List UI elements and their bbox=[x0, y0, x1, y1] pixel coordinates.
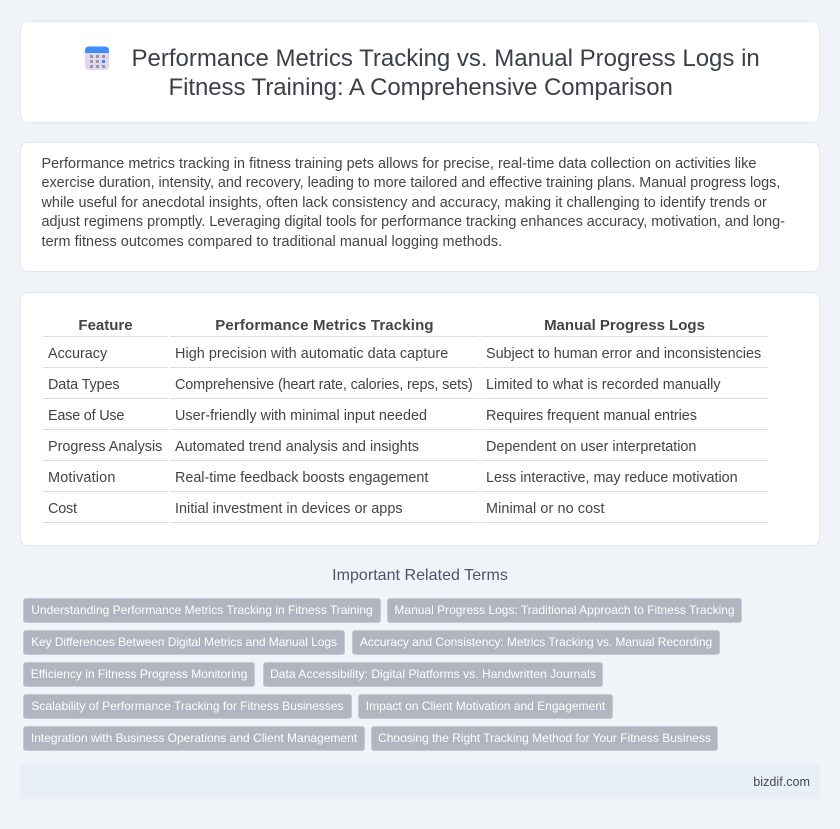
tag bbox=[23, 630, 345, 655]
tag bbox=[352, 630, 720, 655]
tag: Efficiency in Fitness Progress Monitoring bbox=[31, 667, 247, 681]
panel: title card bbox=[20, 21, 820, 123]
row: motivation bbox=[48, 470, 738, 486]
row: ease of use bbox=[48, 408, 697, 424]
tag: Understanding Performance Metrics Tracking in Fitness Training bbox=[31, 603, 373, 617]
tag bbox=[23, 694, 352, 719]
row: accuracy: Accuracy bbox=[48, 346, 107, 362]
tag: Key Differences Between Digital Metrics and Manual Logs bbox=[31, 635, 337, 649]
title bbox=[132, 45, 760, 101]
title: Performance Metrics Tracking vs. Manual Progress Logs in bbox=[132, 45, 760, 72]
row: progress analysis bbox=[48, 439, 696, 455]
tag: Integration with Business Operations and Client Management bbox=[31, 731, 357, 745]
row: progress analysis: Progress Analysis bbox=[48, 439, 162, 455]
footer bar bbox=[20, 765, 820, 799]
tag bbox=[371, 726, 718, 751]
tag bbox=[23, 726, 365, 751]
row: cost: Cost bbox=[48, 501, 77, 517]
title: Fitness Training: A Comprehensive Comparison bbox=[168, 74, 673, 101]
row: motivation: Motivation bbox=[48, 470, 116, 486]
intro paragraph: exercise duration, intensity, and recovery, leading to more tailored and effective training plans. Manual progress logs, bbox=[42, 175, 780, 191]
table header bbox=[78, 317, 705, 334]
row: motivation: Less interactive, may reduce motivation bbox=[486, 470, 738, 486]
tag bbox=[263, 662, 603, 687]
row: data types bbox=[48, 377, 721, 393]
row: cost: Initial investment in devices or apps bbox=[175, 501, 403, 517]
tag: Impact on Client Motivation and Engagement bbox=[366, 699, 605, 713]
intro paragraph: while useful for anecdotal insights, often lack consistency and accuracy, making it challenging to identify trends or bbox=[42, 194, 767, 210]
row: data types: Data Types bbox=[48, 377, 120, 393]
tag: Manual Progress Logs: Traditional Approach to Fitness Tracking bbox=[394, 603, 735, 617]
related terms tags bbox=[23, 598, 742, 751]
table header: Manual Progress Logs bbox=[544, 317, 705, 334]
intro paragraph: term fitness outcomes compared to traditional manual logging methods. bbox=[42, 234, 502, 250]
tag bbox=[358, 694, 613, 719]
tag bbox=[23, 598, 381, 623]
row: data types: Limited to what is recorded manually bbox=[486, 377, 721, 393]
tag bbox=[23, 662, 255, 687]
intro paragraph: adjust regimens promptly. Leveraging digital tools for performance tracking enhances accuracy, motivation, and long- bbox=[42, 214, 785, 230]
tag bbox=[387, 598, 742, 623]
tag: Choosing the Right Tracking Method for Your Fitness Business bbox=[378, 731, 711, 745]
row: cost bbox=[48, 501, 605, 517]
intro paragraph bbox=[42, 156, 785, 250]
row: accuracy bbox=[48, 346, 761, 362]
comparison table bbox=[43, 317, 768, 523]
row: cost: Minimal or no cost bbox=[486, 501, 605, 517]
row: data types: Comprehensive (heart rate, calories, reps, sets) bbox=[175, 377, 473, 393]
row: ease of use: User-friendly with minimal input needed bbox=[175, 408, 427, 424]
related terms heading: Important Related Terms bbox=[332, 567, 508, 584]
intro paragraph: Performance metrics tracking in fitness training pets allows for precise, real-time data collection on activities like bbox=[42, 156, 756, 172]
row: accuracy: Subject to human error and inconsistencies bbox=[486, 346, 761, 362]
panel: intro text card bbox=[20, 142, 820, 272]
row: progress analysis: Dependent on user interpretation bbox=[486, 439, 696, 455]
panel: comparison table card bbox=[20, 292, 820, 546]
row: accuracy: High precision with automatic data capture bbox=[175, 346, 448, 362]
footer text: bizdif.com bbox=[753, 775, 810, 789]
table header: Performance Metrics Tracking bbox=[215, 317, 434, 334]
row: motivation: Real-time feedback boosts engagement bbox=[175, 470, 428, 486]
row: ease of use: Requires frequent manual entries bbox=[486, 408, 697, 424]
table header: Feature bbox=[78, 317, 133, 334]
row: ease of use: Ease of Use bbox=[48, 408, 124, 424]
icon: calendar bbox=[85, 46, 109, 70]
row: progress analysis: Automated trend analysis and insights bbox=[175, 439, 419, 455]
tag: Data Accessibility: Digital Platforms vs. Handwritten Journals bbox=[270, 667, 596, 681]
tag: Scalability of Performance Tracking for Fitness Businesses bbox=[31, 699, 344, 713]
tag: Accuracy and Consistency: Metrics Tracking vs. Manual Recording bbox=[360, 635, 712, 649]
